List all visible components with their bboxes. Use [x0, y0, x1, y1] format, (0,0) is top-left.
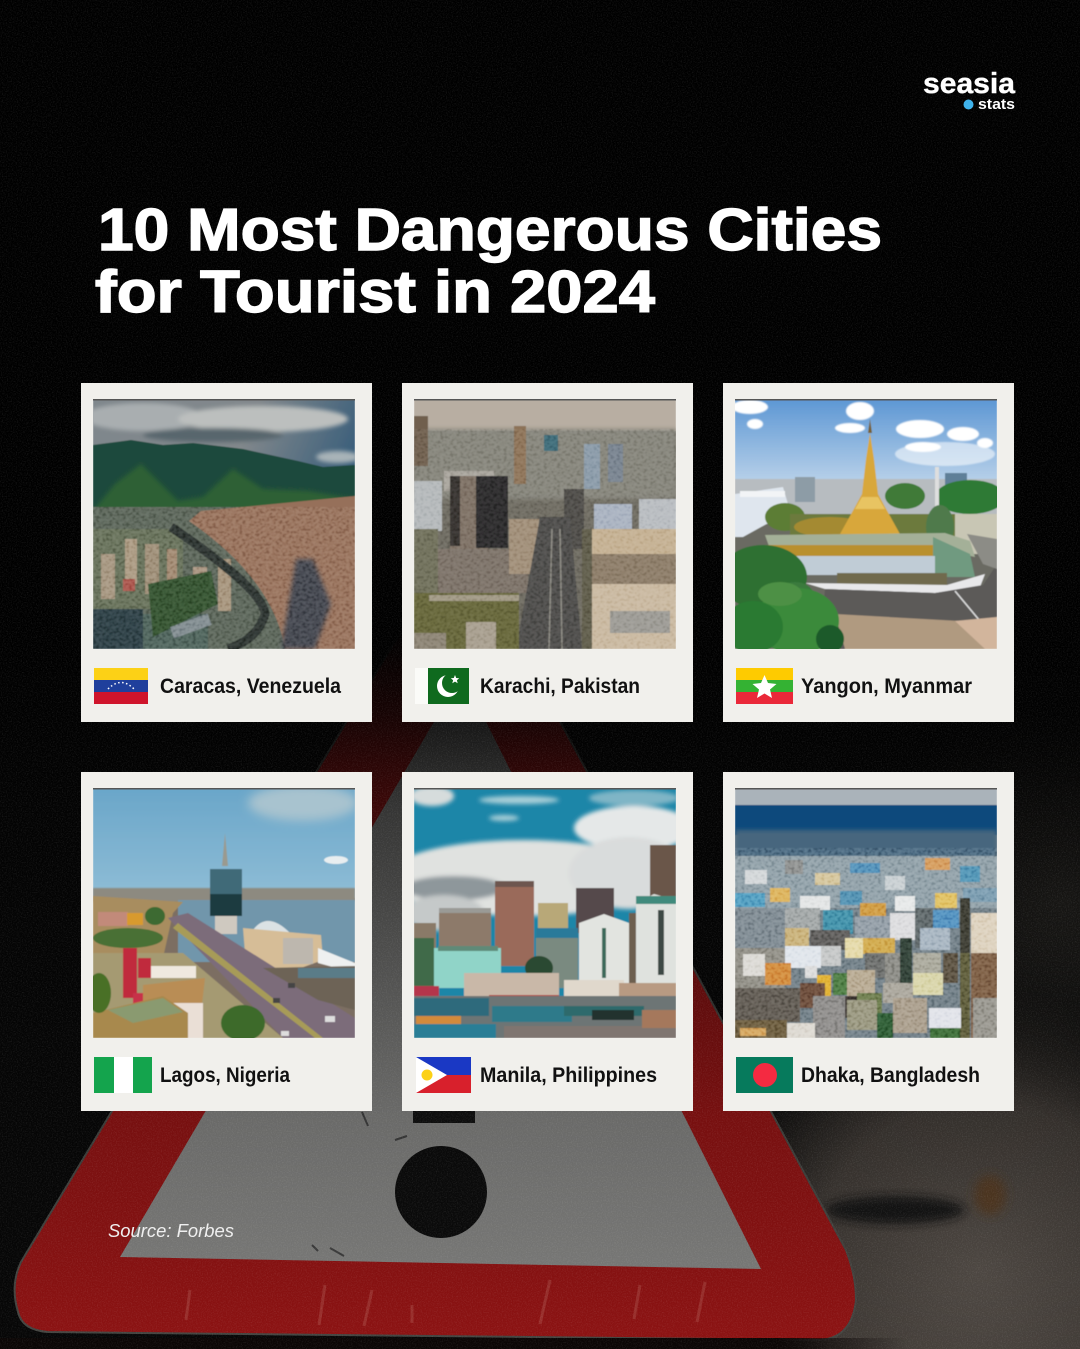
logo: seasia stats [923, 68, 1016, 113]
flag: Nigeria [94, 1057, 152, 1093]
label: Yangon, Myanmar: Yangon, Myanmar [801, 675, 972, 698]
card: Yangon, Myanmar [719, 383, 1014, 722]
flag: Myanmar [736, 668, 793, 704]
warning triangle sign [15, 535, 856, 1340]
source note: Source: Forbes [108, 1221, 234, 1241]
title: for Tourist in 2024 [95, 259, 655, 325]
photo: Manila [414, 788, 676, 1038]
card: Karachi, Pakistan [402, 383, 693, 722]
label: Caracas, Venezuela: Caracas, Venezuela [160, 675, 341, 698]
flag: Pakistan [415, 668, 469, 704]
card: Caracas, Venezuela [81, 383, 372, 722]
logo: seasia stats: stats [978, 96, 1015, 113]
photo: Lagos [93, 788, 355, 1038]
card: Dhaka, Bangladesh [723, 772, 1014, 1111]
title [95, 197, 882, 325]
photo: Caracas [93, 399, 355, 649]
card: Manila, Philippines [384, 772, 694, 1111]
label: Karachi, Pakistan: Karachi, Pakistan [480, 675, 640, 698]
title: 10 Most Dangerous Cities [98, 197, 882, 263]
photo: Dhaka [735, 788, 997, 1038]
flag: Venezuela [94, 668, 148, 704]
card: Lagos, Nigeria [81, 772, 372, 1111]
label: Manila, Philippines: Manila, Philippines [480, 1064, 657, 1087]
label: Dhaka, Bangladesh: Dhaka, Bangladesh [801, 1064, 980, 1087]
photo: Karachi [414, 399, 676, 649]
flag: Bangladesh [736, 1057, 793, 1093]
icon: blue dot [964, 100, 974, 110]
label: Lagos, Nigeria: Lagos, Nigeria [160, 1064, 290, 1087]
logo: seasia stats: seasia [923, 68, 1016, 100]
photo: Yangon [735, 399, 997, 649]
flag: Philippines [416, 1057, 471, 1093]
